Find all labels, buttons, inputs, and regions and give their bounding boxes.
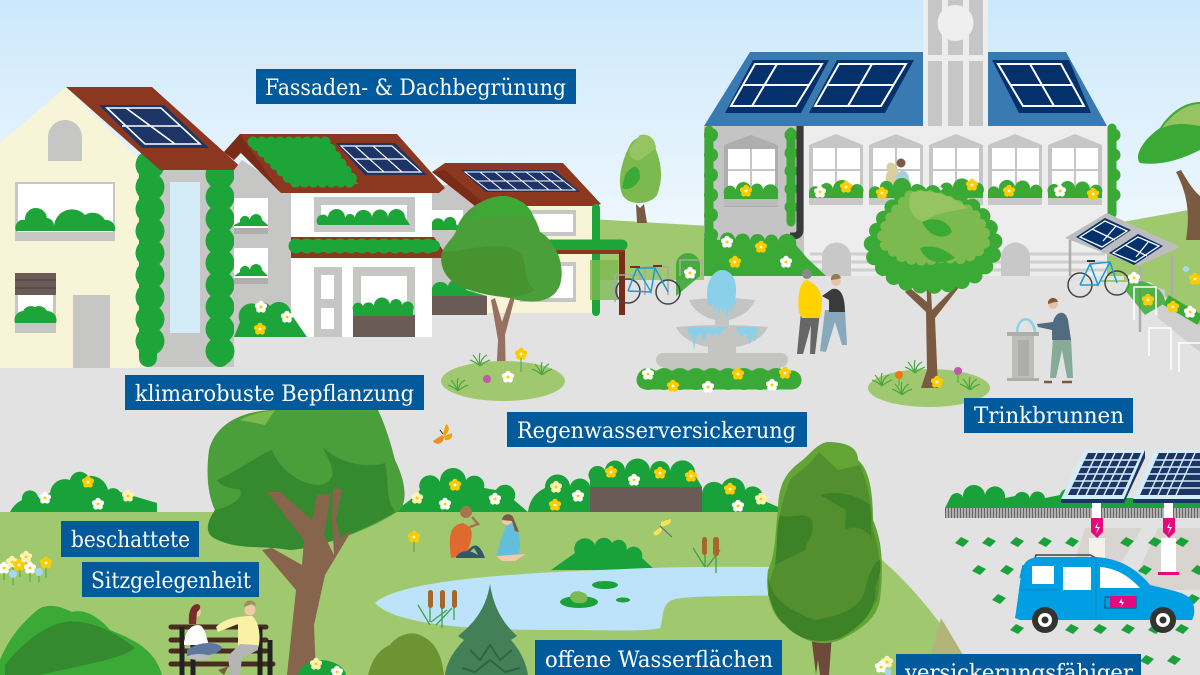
- hall tower: [923, 0, 988, 126]
- green roof: [253, 142, 354, 182]
- house 1 cream: [0, 87, 244, 368]
- icon: butterfly: [433, 424, 452, 444]
- pergola: [550, 245, 625, 315]
- label: beschattete: beschattete: [71, 528, 190, 553]
- bike racks and hedge left: [615, 253, 702, 302]
- house 3 side wall: [432, 185, 482, 315]
- meadow flowers right: [1183, 266, 1200, 285]
- solar carport panels: [1061, 450, 1200, 503]
- car roof rail: [1035, 555, 1096, 558]
- house 2 upper side windows: [234, 198, 268, 284]
- window flowers and sills: [809, 179, 1102, 205]
- bench with people: [171, 600, 273, 675]
- label: beschattete: [61, 521, 199, 557]
- icon: dragonfly: [654, 519, 672, 537]
- green awning: [291, 237, 445, 258]
- door: [73, 295, 110, 368]
- hall right wall: [804, 126, 1107, 276]
- cattails pond left: [418, 590, 457, 628]
- fountain flower hedge: [642, 367, 792, 393]
- solar panel B: [1133, 450, 1200, 503]
- label: Trinkbrunnen: Trinkbrunnen: [974, 404, 1124, 429]
- woman on lawn: [496, 514, 526, 561]
- flowers by bottom label: [875, 656, 893, 675]
- ground: [0, 270, 1200, 675]
- woman on bench: [184, 604, 222, 660]
- hedge beside planter: [528, 474, 590, 512]
- frog and lily pads: [560, 581, 630, 608]
- charging station right: [1158, 503, 1179, 575]
- house 2 upper window: [314, 197, 415, 232]
- foliage dark scalloped base: [871, 193, 995, 286]
- foliage light: [882, 195, 985, 260]
- house 2 roof: [224, 134, 445, 193]
- large bush bottom left: [0, 606, 162, 675]
- sky: [0, 0, 1200, 280]
- fir tree: [445, 584, 528, 675]
- car details: [1020, 557, 1096, 620]
- bicycle left: [616, 266, 680, 304]
- couple on lawn: [450, 506, 526, 561]
- house 3 cream wall: [475, 206, 598, 313]
- house 2 lower window and planter: [353, 267, 415, 337]
- fence slats: [945, 508, 1200, 518]
- house 2 white block: [291, 193, 432, 337]
- cattails pond right: [693, 537, 720, 573]
- label: Sitzgelegenheit: Sitzgelegenheit: [91, 569, 251, 594]
- house 1 roof: [66, 87, 244, 170]
- fountain: [656, 270, 788, 374]
- label: Regenwasserversickerung: [507, 412, 807, 447]
- man at fountain: [1037, 298, 1073, 382]
- foliage shadows: [920, 219, 955, 262]
- hall solar panel 2: [809, 60, 914, 113]
- label: klimarobuste Bepflanzung: klimarobuste Bepflanzung: [135, 382, 414, 407]
- label: versickerungsfaehiger: [896, 654, 1141, 675]
- foliage: [441, 196, 562, 301]
- glass strip: [170, 182, 200, 333]
- elderly couple: [797, 269, 847, 354]
- house 1 solar panel: [99, 105, 209, 148]
- parking bays: [1066, 528, 1200, 590]
- label: Sitzgelegenheit: [82, 562, 259, 597]
- flowering bush at house: [234, 301, 307, 337]
- grass island with flowers left: [441, 348, 565, 401]
- label: Trinkbrunnen: [964, 398, 1133, 433]
- trunk: [491, 296, 515, 380]
- green hill right: [1100, 208, 1200, 330]
- central tree: [868, 191, 995, 407]
- hall left wall: [704, 126, 804, 276]
- house 2 door: [314, 267, 342, 337]
- town hall: [704, 0, 1114, 276]
- bike shelter with solar panels: [1065, 213, 1180, 332]
- balustrade: [810, 254, 1105, 270]
- bicycle right: [1068, 261, 1129, 297]
- ivy house 3: [592, 208, 600, 312]
- hall ivy: [709, 128, 1114, 240]
- hall windows row: [809, 134, 1102, 205]
- poplar tree: [767, 442, 882, 675]
- man in yellow: [797, 269, 822, 354]
- car wheels: [1032, 607, 1176, 633]
- stair tower: [150, 170, 234, 367]
- car battery: [1105, 596, 1136, 608]
- green hill left: [590, 219, 710, 280]
- big window with bush: [15, 182, 115, 241]
- tan wedge: [925, 618, 975, 675]
- bench: [171, 627, 273, 675]
- small window with shutter: [14, 273, 57, 333]
- house 3 roof: [432, 163, 601, 206]
- central island flowers: [872, 360, 980, 395]
- fountain water: [687, 270, 758, 350]
- shelter panel 2: [1109, 234, 1163, 265]
- car body: [1015, 557, 1194, 620]
- house 2: [224, 134, 445, 337]
- grass island: [868, 369, 990, 407]
- shelter roof: [1065, 213, 1180, 266]
- pond: [375, 567, 780, 630]
- hedge right of planter: [702, 478, 790, 512]
- man on bench: [216, 600, 260, 675]
- woman in black: [820, 274, 847, 352]
- big tree dark foliage: [208, 447, 395, 550]
- electric car: [1015, 555, 1194, 633]
- right raised bed and racks: [1125, 272, 1200, 372]
- house 2 grey wall: [234, 160, 291, 337]
- shelter panel 1: [1076, 218, 1131, 250]
- raised planter: [588, 458, 702, 512]
- label: klimarobuste Bepflanzung: [125, 375, 424, 410]
- arch gates: [822, 242, 1030, 276]
- downpipe: [790, 126, 800, 236]
- house 3: [431, 163, 601, 315]
- house 3 solar panel: [461, 170, 580, 192]
- hall solar panel 3: [992, 60, 1091, 113]
- fence: [945, 508, 1200, 518]
- big tree trunk: [262, 488, 352, 675]
- facade ivy right: [211, 170, 229, 358]
- poplar trunk: [811, 634, 832, 675]
- left hall window: [724, 135, 778, 207]
- man on lawn: [450, 506, 485, 558]
- hedge with flowers left: [10, 472, 157, 512]
- fountain base: [656, 298, 788, 374]
- hall roof right: [988, 52, 1107, 126]
- poplar foliage: [767, 442, 882, 643]
- grass pavers: [955, 537, 1200, 665]
- people in window: [884, 158, 909, 195]
- tree in front of houses: [441, 196, 562, 380]
- single yellow flower: [408, 531, 420, 552]
- window bushes: [809, 178, 1102, 198]
- hall base flower bush: [704, 232, 826, 276]
- label: offene Wasserflaechen: [535, 640, 782, 675]
- hall solar panel 1: [725, 60, 829, 113]
- shelter posts: [1070, 240, 1172, 332]
- house 3 planter: [432, 279, 487, 315]
- facade ivy left: [148, 160, 150, 358]
- small flower bush bottom: [298, 658, 346, 675]
- label: Regenwasserversickerung: Regenwasserversickerung: [517, 419, 796, 444]
- attic arch window: [48, 120, 82, 161]
- olive bush: [368, 633, 444, 675]
- big tree: [208, 410, 405, 675]
- car windows: [1032, 566, 1140, 590]
- tree right edge: [1138, 102, 1200, 240]
- label: offene Wasserflaechen: offene Wasserflächen: [545, 648, 773, 673]
- solar panel A: [1061, 450, 1145, 503]
- charging station left: [1089, 503, 1105, 560]
- house 1 wall: [0, 87, 150, 368]
- big tree foliage: [208, 410, 405, 550]
- lawn: [0, 512, 975, 675]
- label: Fassaden- und Dachbegruenung: [256, 69, 576, 104]
- small tree behind: [620, 135, 661, 223]
- bush behind pond: [551, 538, 655, 570]
- hall roof left: [704, 52, 923, 126]
- meadow flowers left: [0, 551, 52, 585]
- trunk: [905, 270, 960, 388]
- ground front patch over hall base: [704, 276, 1124, 280]
- hedge with flowers centre: [394, 468, 528, 512]
- drinking fountain: [1007, 319, 1039, 381]
- label: Fassaden- und Dachbegruenung: Fassaden- & Dachbegrünung: [265, 76, 566, 101]
- hedge behind fence: [945, 485, 1200, 508]
- house 3 windows: [520, 210, 576, 302]
- house 2 solar panel: [336, 143, 427, 175]
- foliage highlights: [909, 191, 968, 222]
